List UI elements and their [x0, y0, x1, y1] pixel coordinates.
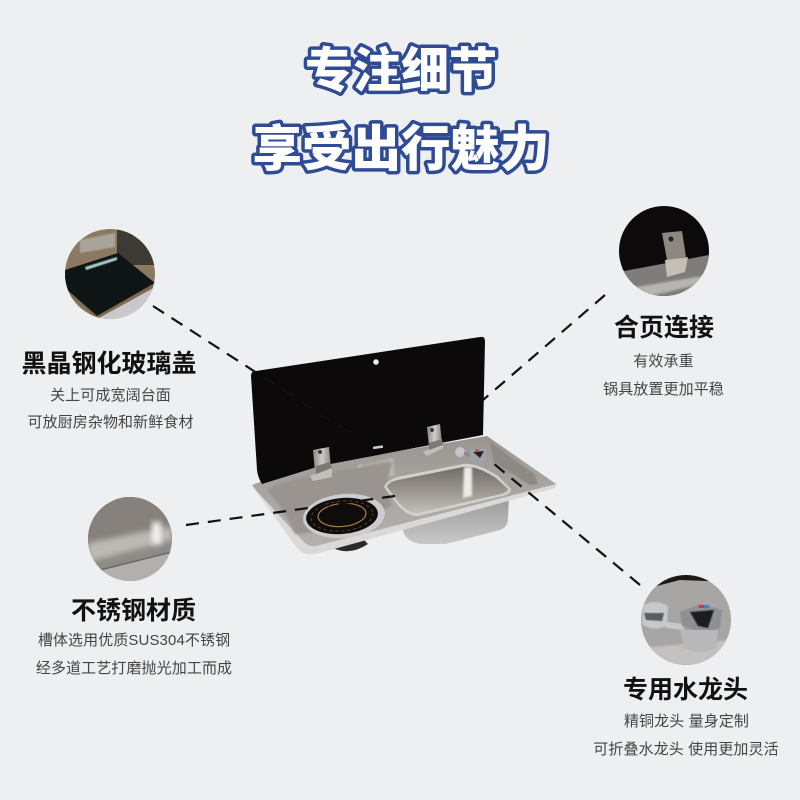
- glass lid: [251, 337, 485, 484]
- photo circle: stainless steel: [88, 497, 172, 581]
- title: 享受出行魅力: [252, 122, 550, 177]
- photo circle: faucet: [641, 575, 731, 665]
- faucet: [455, 447, 487, 465]
- photo circle: black glass lid: [65, 229, 155, 319]
- text: faucet description: 精铜龙头 量身定制: [624, 713, 749, 730]
- title: 专注细节: [305, 45, 497, 98]
- rear deck wall highlight: [357, 458, 395, 480]
- sink underside bowl: [402, 496, 509, 544]
- text: glass lid description: [27, 387, 194, 431]
- text: stainless steel description: 经多道工艺打磨抛光加工而成: [36, 660, 232, 677]
- text: stainless steel description: [36, 632, 232, 677]
- dashed leader: stainless steel: [186, 495, 402, 525]
- product photo: sink with glass lid: [251, 337, 556, 554]
- stove recess: [267, 462, 392, 534]
- right basin: [387, 467, 508, 513]
- basin highlight: [463, 467, 472, 498]
- text: stainless steel description: 槽体选用优质SUS304不锈钢: [38, 632, 230, 649]
- hob ring: [301, 491, 387, 541]
- text: glass lid description: 可放厨房杂物和新鲜食材: [27, 414, 194, 431]
- sink deck: [252, 436, 556, 552]
- photo circle: hinge: [619, 206, 709, 296]
- lid hole: [373, 359, 379, 365]
- dashed leader: hinge: [483, 295, 605, 400]
- dashed leader: faucet: [493, 463, 640, 585]
- text: hinge description: 有效承重: [633, 353, 694, 370]
- dashed leader: glass lid: [153, 306, 350, 433]
- drain: [333, 540, 368, 551]
- left hinge: [310, 447, 332, 481]
- text: glass lid description: 关上可成宽阔台面: [50, 387, 171, 404]
- right hinge: [423, 424, 443, 456]
- text: hinge description: 锅具放置更加平稳: [603, 381, 724, 398]
- side channel: [490, 442, 538, 485]
- heading: hinge: 合页连接: [614, 314, 714, 342]
- text: faucet description: [593, 713, 779, 758]
- hob: [305, 495, 379, 537]
- title: [252, 45, 550, 177]
- basin rim: [384, 464, 511, 516]
- heading: faucet: 专用水龙头: [623, 676, 748, 704]
- text: hinge description: [603, 353, 724, 398]
- front lip: [252, 484, 556, 554]
- lid logo: [373, 445, 383, 449]
- text: faucet description: 可折叠水龙头 使用更加灵活: [593, 741, 779, 758]
- heading: stainless steel: 不锈钢材质: [71, 597, 196, 625]
- heading: glass lid: 黑晶钢化玻璃盖: [21, 350, 197, 378]
